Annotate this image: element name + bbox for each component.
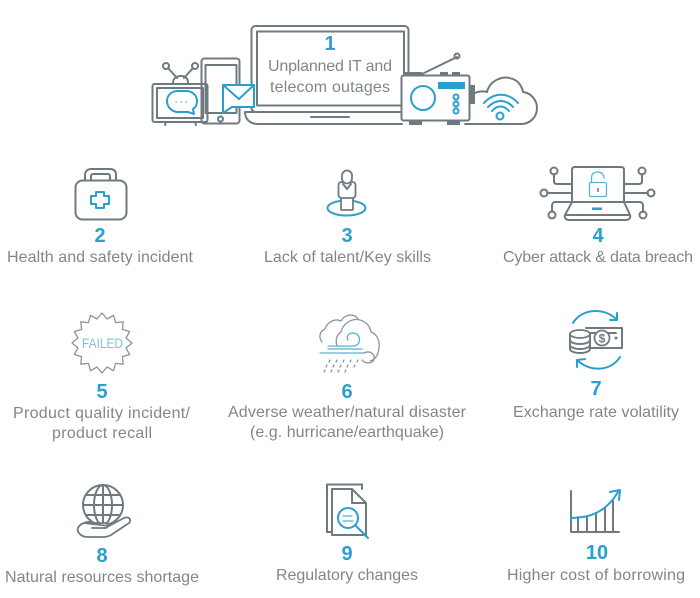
- number 3: 3: [341, 225, 353, 247]
- number 10: 10: [586, 542, 608, 564]
- panel: risk 4, cyber attack: [503, 167, 693, 266]
- icon: globe on hand: [78, 485, 130, 537]
- label: Adverse weather / natural disaster: (e.g. hurricane/earthquake): [250, 424, 444, 441]
- icon: radio: [402, 54, 475, 125]
- number 7: 7: [590, 378, 602, 400]
- panel: risk 1, IT and telecom outages: [152, 26, 537, 125]
- label: Product quality incident / product recall: [13, 405, 191, 442]
- icon: failed stamp: FAILED: [82, 335, 123, 351]
- icon: envelope: [223, 85, 254, 113]
- icon: television: [152, 63, 208, 125]
- panel: risk 8, natural resources: [5, 485, 199, 586]
- number 1: 1: [324, 33, 336, 55]
- label: Unplanned IT and telecom outages: [268, 58, 392, 96]
- panel: risk 7, exchange rate: [513, 311, 679, 421]
- label: Product quality incident / product recall: Product quality incident/: [13, 405, 191, 422]
- number 4: 4: [592, 225, 604, 247]
- icon: tablet: [202, 58, 240, 124]
- icon: laptop: [245, 26, 408, 124]
- icon: first aid kit: [76, 169, 126, 220]
- number 5: 5: [96, 381, 108, 403]
- label: Health and safety incident: Health and safety incident: [7, 249, 194, 266]
- icon: money and exchange arrows: [570, 311, 622, 369]
- label: Cyber attack and data breach: Cyber attack & data breach: [503, 249, 693, 266]
- icon: documents and magnifier: [327, 484, 368, 538]
- label: Higher cost of borrowing: Higher cost of borrowing: [507, 567, 685, 584]
- panel: risk 2, health and safety: [7, 169, 194, 266]
- panel: risk 3, talent: [264, 170, 431, 266]
- number 6: 6: [341, 381, 353, 403]
- panel: risk 6, adverse weather: [228, 315, 467, 441]
- label: Product quality incident / product recall: product recall: [52, 425, 152, 442]
- icon: failed stamp: [72, 313, 132, 373]
- icon: money and exchange arrows: $: [599, 332, 606, 346]
- icon: rising chart: [571, 490, 620, 532]
- icon: wifi cloud: [465, 78, 537, 124]
- label: Regulatory changes: Regulatory changes: [276, 567, 418, 584]
- number 2: 2: [94, 225, 106, 247]
- panel: risk 9, regulatory changes: [276, 484, 418, 584]
- panel: risk 10, cost of borrowing: [507, 490, 685, 584]
- icon: person on ring: [328, 170, 366, 216]
- label: Unplanned IT and telecom outages: Unplanned IT and: [268, 58, 392, 75]
- label: Adverse weather / natural disaster: Adverse weather/natural disaster: [228, 404, 467, 421]
- label: Natural resources shortage: Natural resources shortage: [5, 569, 199, 586]
- panel: risk 5, product quality: [13, 313, 191, 442]
- number 9: 9: [341, 543, 353, 565]
- label: Exchange rate volatility: Exchange rate volatility: [513, 404, 679, 421]
- label: Lack of talent/Key skills: Lack of talent/Key skills: [264, 249, 431, 266]
- number 8: 8: [96, 545, 108, 567]
- label: Adverse weather / natural disaster: [228, 404, 467, 441]
- icon: storm cloud: [320, 315, 379, 372]
- label: Unplanned IT and telecom outages: telecom outages: [270, 79, 390, 96]
- icon: laptop with padlock and circuit: [540, 167, 654, 220]
